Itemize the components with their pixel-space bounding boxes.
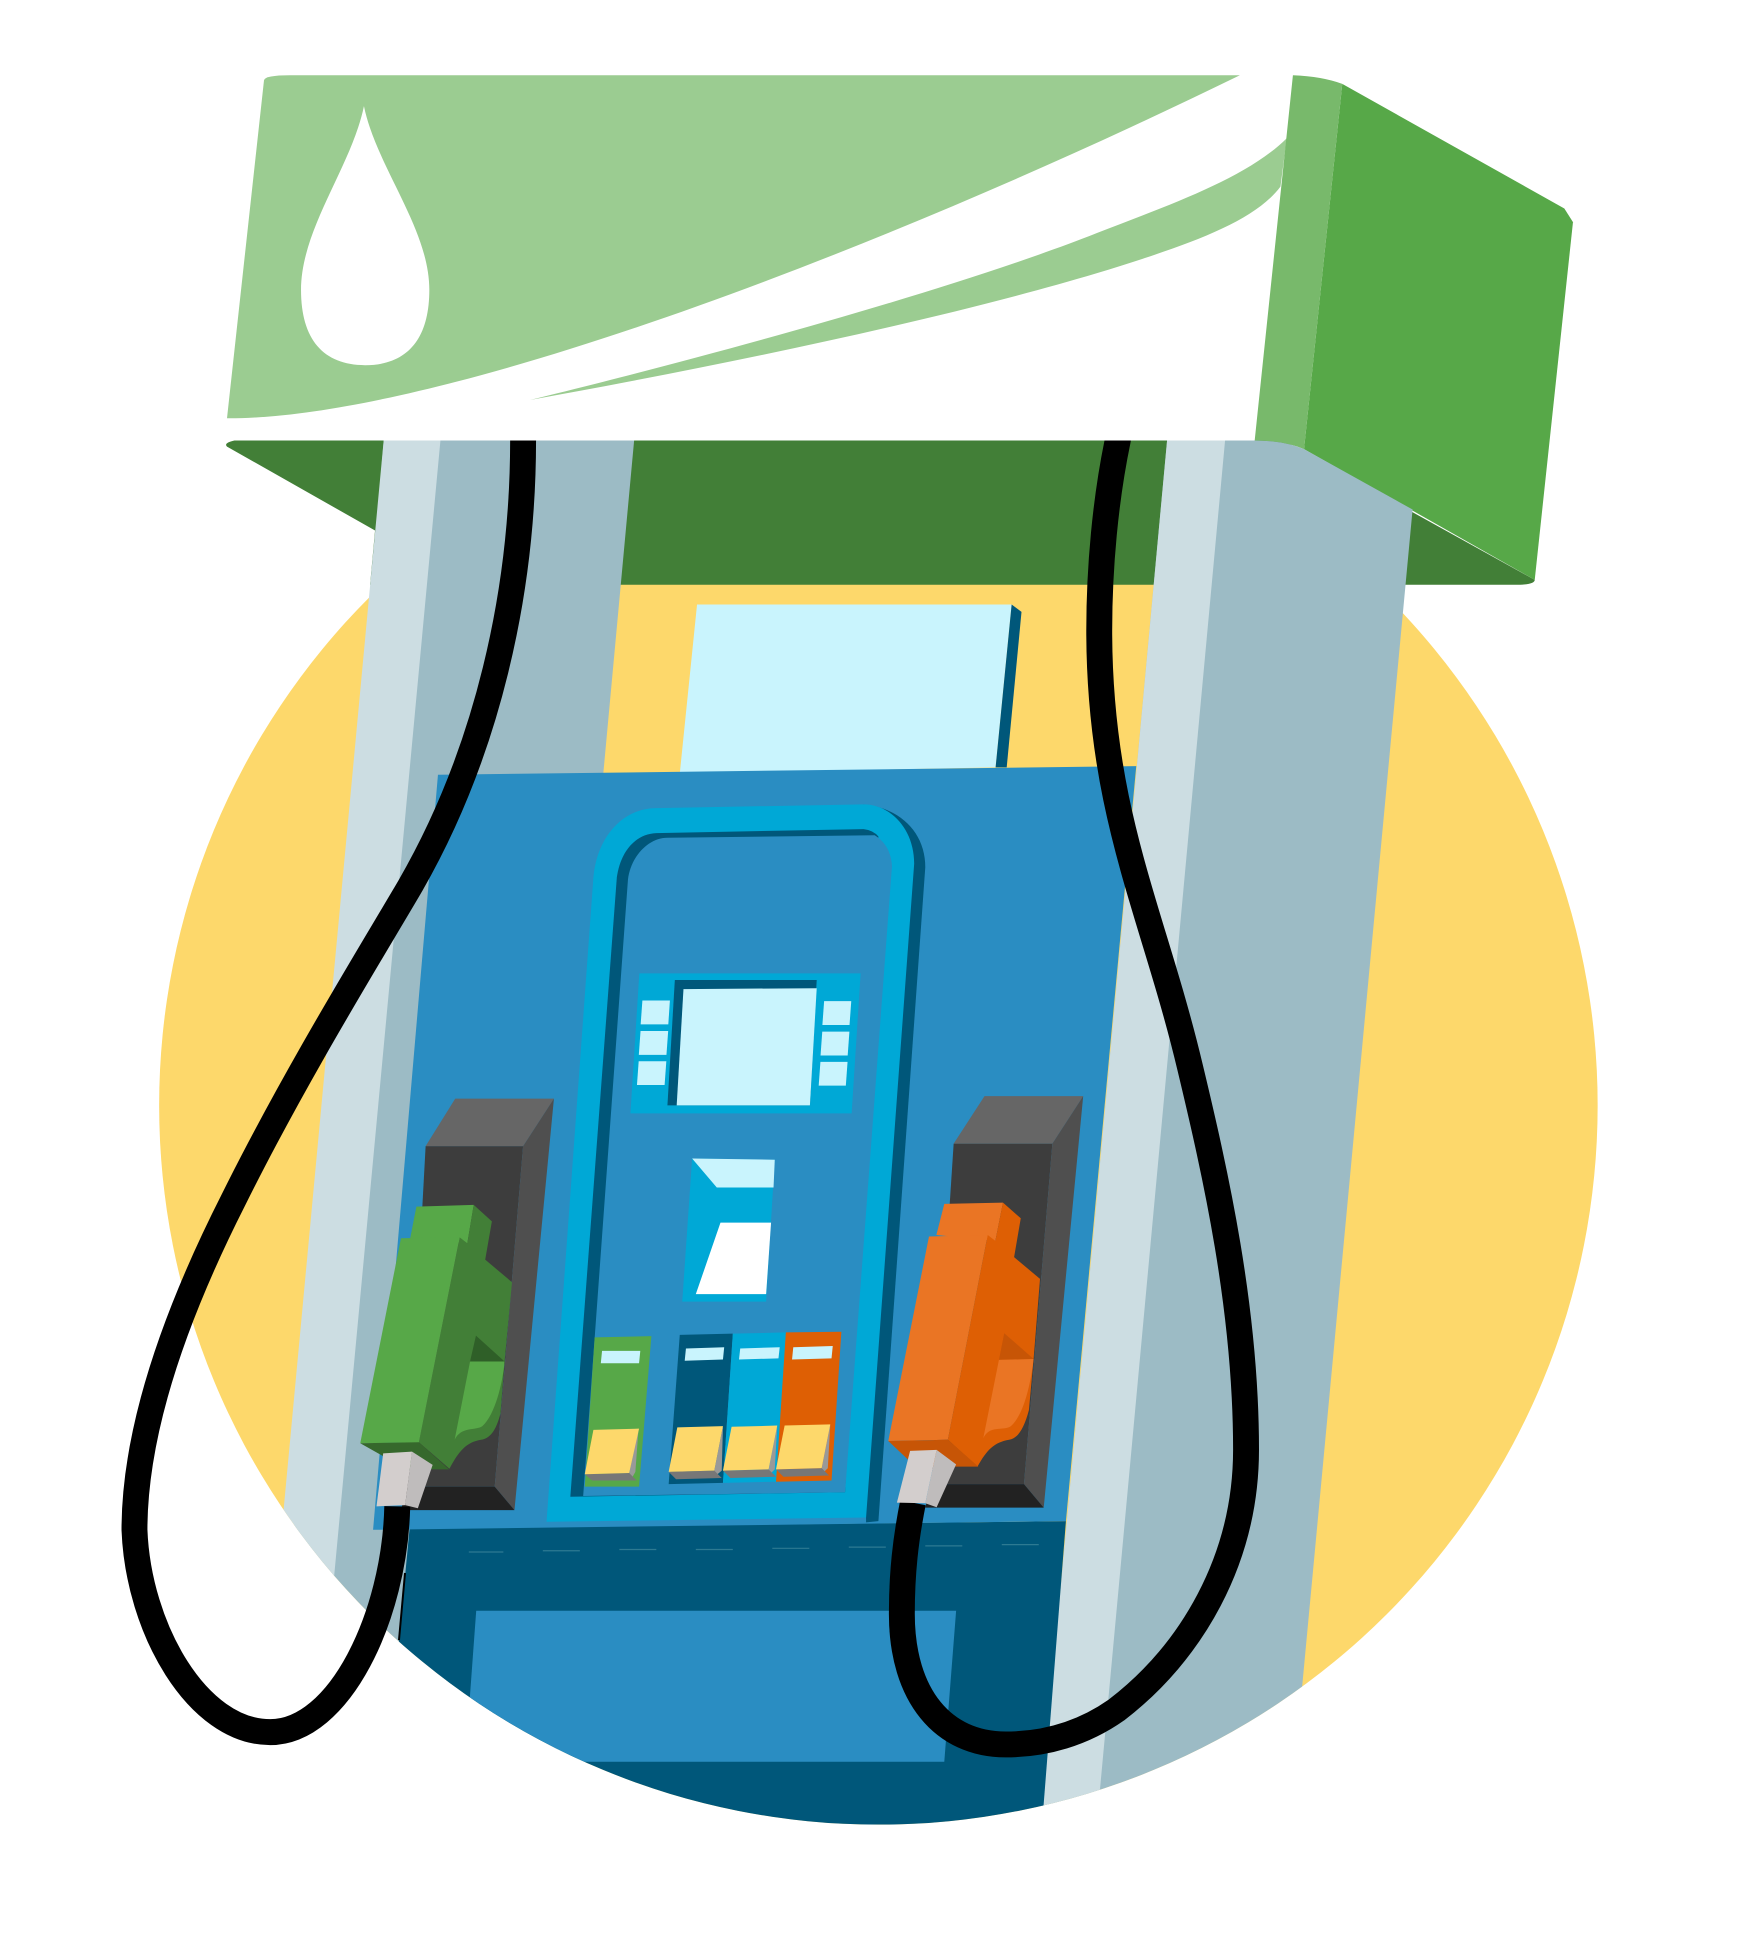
- console screen: [630, 973, 861, 1113]
- right nozzle holster: [925, 1096, 1083, 1508]
- canopy right face: [1304, 84, 1573, 580]
- illustration: fuel pump: [122, 75, 1598, 1825]
- canopy corner strip: [1255, 75, 1342, 449]
- orange nozzle: [888, 1203, 1040, 1507]
- display frame: [547, 804, 925, 1522]
- payment slot: [682, 1158, 775, 1302]
- canopy underside: [226, 440, 1535, 585]
- canopy front panel: [227, 75, 1287, 418]
- keypad buttons: [637, 1001, 851, 1086]
- dark blue grade: [669, 1334, 733, 1484]
- screen back panel: [680, 605, 1022, 774]
- cyan grade: [723, 1332, 786, 1483]
- canopy swoosh large: [227, 75, 1240, 418]
- green nozzle: [360, 1205, 512, 1508]
- right hose: [902, 419, 1246, 1744]
- yellow background circle: [159, 584, 1598, 1825]
- icon: water drop: [301, 106, 429, 365]
- canopy swoosh small: [530, 138, 1287, 400]
- right pillar: [1036, 440, 1413, 1851]
- left hose: [134, 419, 523, 1732]
- orange grade: [776, 1332, 841, 1482]
- left nozzle holster: [401, 1099, 554, 1510]
- fuel grade selectors: [585, 1332, 841, 1487]
- green grade: [585, 1336, 651, 1487]
- pillars: [270, 440, 1413, 1851]
- left pillar: [270, 440, 634, 1727]
- nozzle tip: [897, 1450, 956, 1507]
- pump body panel: [373, 766, 1136, 1530]
- nozzle tip: [377, 1452, 433, 1508]
- pump base: [382, 1521, 1066, 1851]
